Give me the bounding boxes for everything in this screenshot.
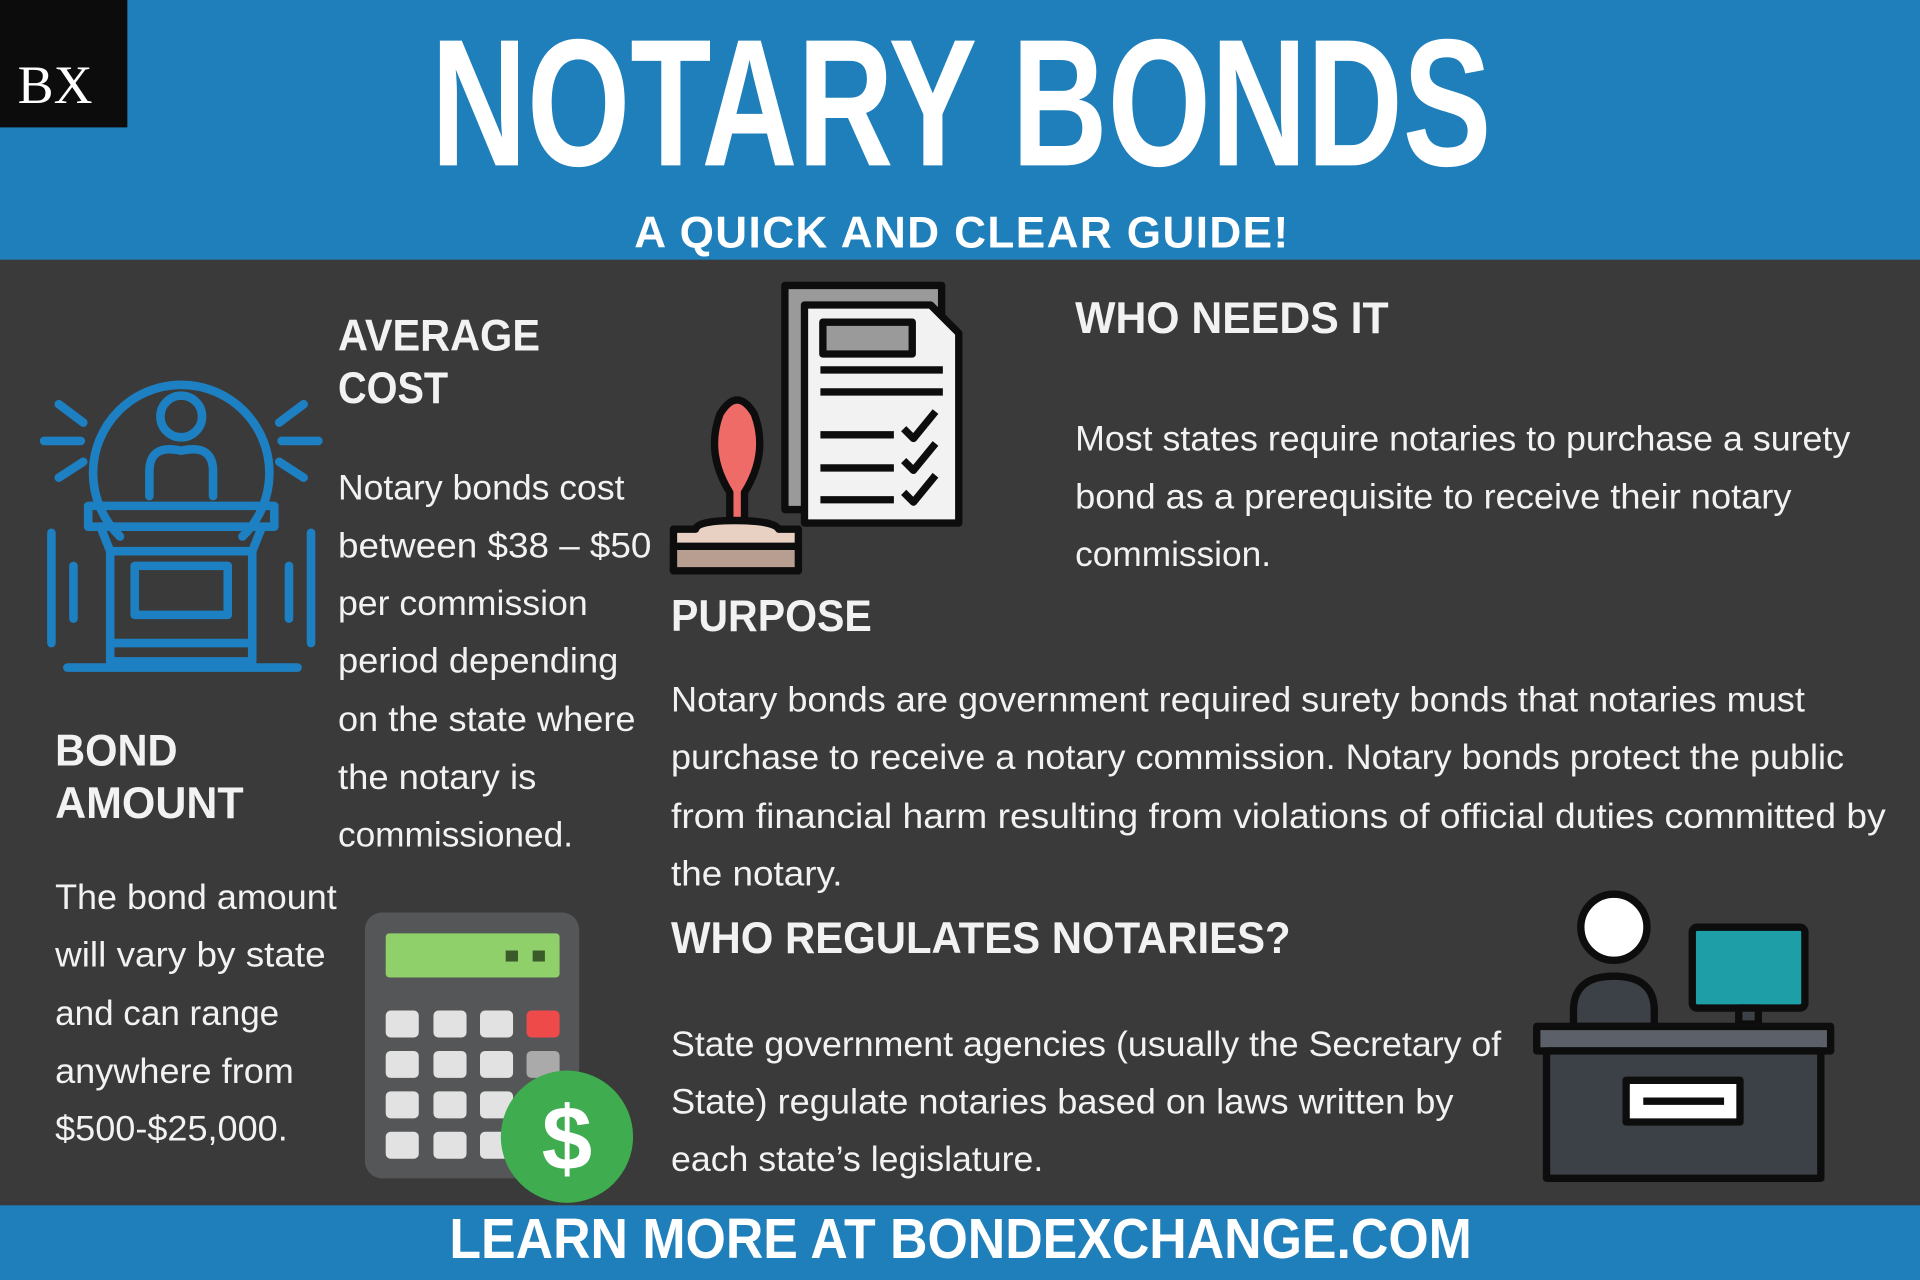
logo: BX: BX (18, 55, 93, 115)
section: average cost: AVERAGE (338, 311, 540, 360)
section: purpose: from financial harm resulting from violations of official duties committed by (671, 796, 1886, 836)
section: who needs it: commission. (1075, 534, 1271, 574)
section: who needs it: bond as a prerequisite to receive their notary (1075, 476, 1792, 516)
section: purpose: the notary. (671, 854, 842, 894)
footer band (0, 1205, 1920, 1280)
section: who needs it (1075, 294, 1850, 574)
section: average cost (338, 311, 651, 854)
icon: document and stamp (673, 285, 959, 571)
footer band: LEARN MORE AT BONDEXCHANGE.COM (449, 1207, 1472, 1270)
section: who regulates notaries: each state’s legislature. (671, 1139, 1043, 1179)
section: who needs it: WHO NEEDS IT (1075, 294, 1389, 343)
section: average cost: the notary is (338, 757, 536, 797)
icon: podium speaker (44, 385, 318, 668)
section: bond amount: anywhere from (55, 1051, 294, 1091)
section: average cost: per commission (338, 583, 588, 623)
section: who needs it: Most states require notaries to purchase a surety (1075, 419, 1850, 459)
icon: calculator with dollar (365, 913, 633, 1203)
section: average cost: Notary bonds cost (338, 468, 625, 508)
icon: person at desk (1537, 894, 1831, 1178)
section: average cost: on the state where (338, 699, 636, 739)
section: purpose: PURPOSE (671, 592, 872, 641)
subtitle: A QUICK AND CLEAR GUIDE! (634, 208, 1288, 257)
section: average cost: commissioned. (338, 814, 573, 854)
section: purpose: Notary bonds are government required surety bonds that notaries must (671, 680, 1805, 720)
section: bond amount: AMOUNT (55, 779, 244, 828)
section: who regulates notaries (671, 914, 1501, 1179)
icon: calculator with dollar: $ (542, 1089, 592, 1190)
section: average cost: COST (338, 364, 448, 413)
section: bond amount: The bond amount (55, 877, 337, 917)
header band (0, 0, 1920, 260)
section: purpose (671, 592, 1886, 894)
section: bond amount: will vary by state (54, 934, 326, 974)
logo: BX (0, 0, 127, 127)
section: bond amount: $500-$25,000. (55, 1108, 288, 1148)
section: average cost: period depending (338, 640, 618, 680)
section: who regulates notaries: State government agencies (usually the Secretary of (671, 1024, 1501, 1064)
section: bond amount: BOND (55, 727, 178, 776)
section: bond amount: and can range (55, 993, 279, 1033)
section: average cost: between $38 – $50 (338, 525, 651, 565)
section: bond amount (54, 727, 337, 1148)
section: who regulates notaries: State) regulate notaries based on laws written by (671, 1081, 1454, 1121)
title: NOTARY BONDS (431, 2, 1491, 204)
section: purpose: purchase to receive a notary commission. Notary bonds protect the public (671, 737, 1844, 777)
section: who regulates notaries: WHO REGULATES NOTARIES? (671, 914, 1291, 963)
